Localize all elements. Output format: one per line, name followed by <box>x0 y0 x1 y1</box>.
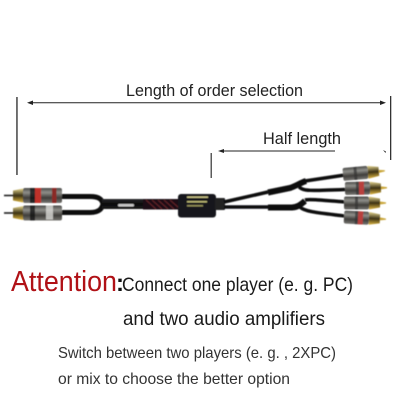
main cable with braid <box>102 199 179 210</box>
heading: length of order selection: Length of order selection <box>126 81 303 100</box>
audio cable product image <box>4 164 387 226</box>
text: two audio amplifiers: and two audio amplifiers <box>123 308 325 330</box>
left RCA plugs <box>4 188 62 220</box>
dimension: half length line with arrow <box>211 149 386 178</box>
centre splitter block <box>178 194 225 218</box>
dimension: full length line with arrows <box>16 96 391 175</box>
attention colon: : <box>116 270 124 297</box>
text: switch between players: Switch between two players (e. g. , 2XPC) <box>58 345 336 362</box>
text: connect one player: Connect one player (e. g. PC) <box>122 274 353 296</box>
attention label: Attention <box>11 266 117 298</box>
left cable fork <box>62 196 103 212</box>
text: mix option: or mix to choose the better option <box>58 371 290 388</box>
heading: half length: Half length <box>263 129 341 148</box>
right RCA plugs <box>342 164 387 226</box>
right cable branches <box>224 175 345 216</box>
